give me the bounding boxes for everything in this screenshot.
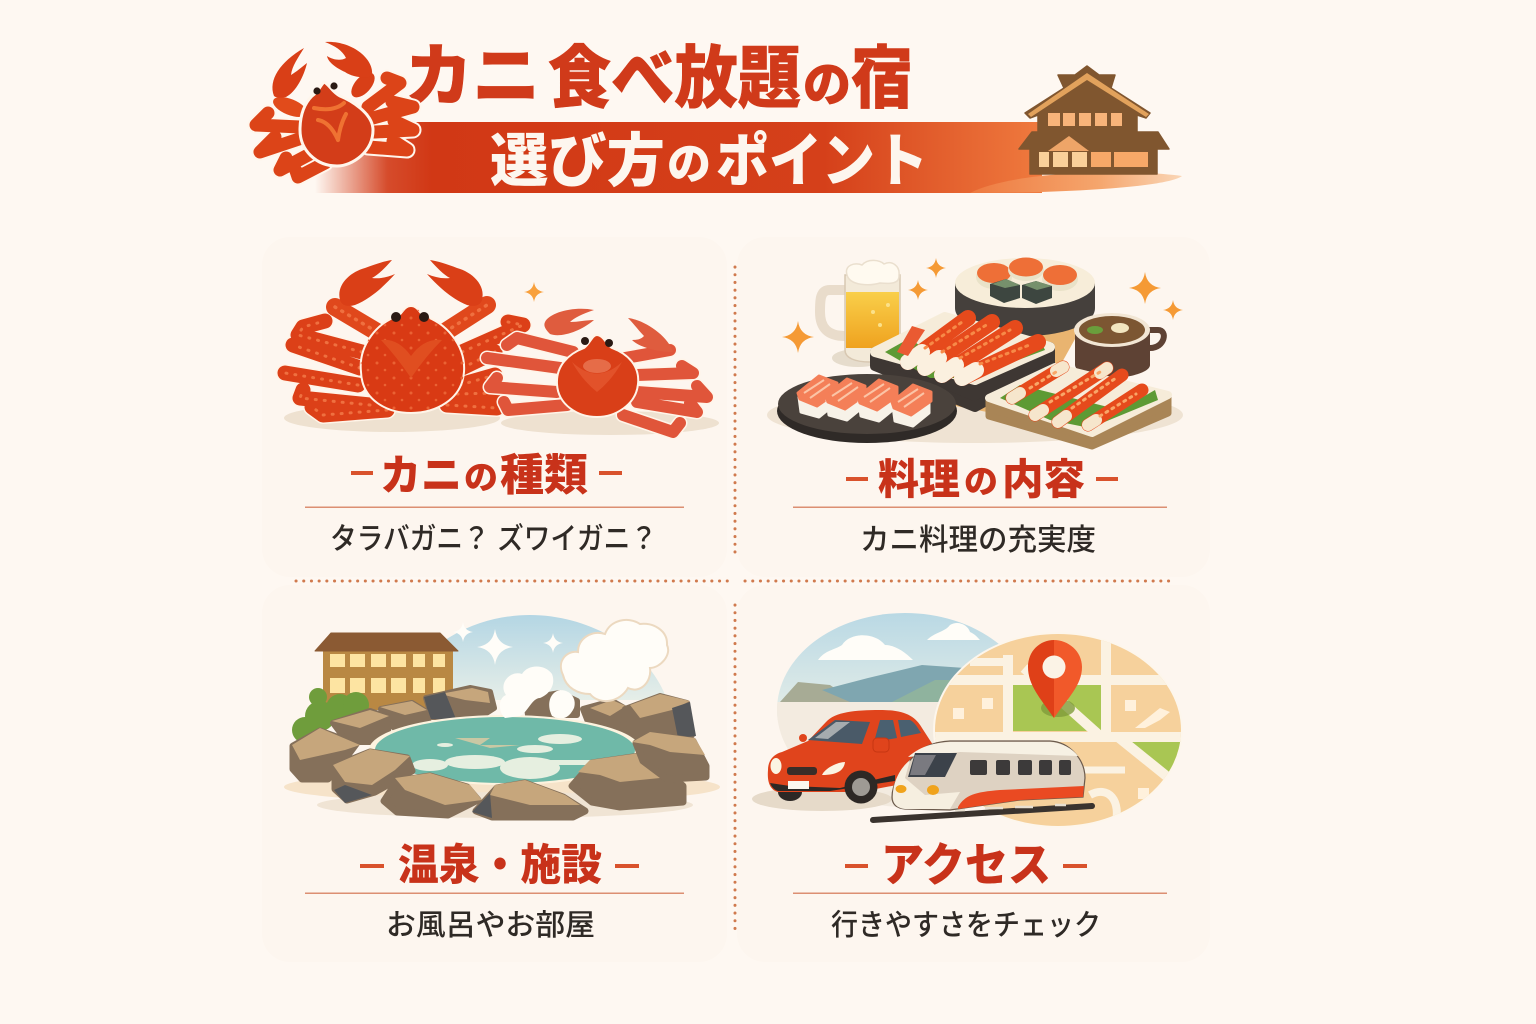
- card subtitle: タラバガニ？ ズワイガニ？: [330, 523, 657, 556]
- left sushi plate: [777, 374, 957, 443]
- card subtitle: カニ料理の充実度: [860, 524, 1096, 557]
- panel background: [262, 237, 727, 577]
- stars: [453, 622, 563, 665]
- title text: [405, 39, 913, 117]
- subtitle text: ポイント: [716, 129, 928, 194]
- subtitle text: 選び方: [490, 129, 665, 194]
- title text: 食べ放題: [548, 41, 801, 117]
- card subtitle: 行きやすさをチェック: [831, 909, 1101, 942]
- card heading: カニ: [380, 452, 462, 499]
- panel background: [737, 237, 1210, 577]
- title text: カニ: [405, 39, 540, 115]
- steam: [500, 620, 668, 718]
- icon: ryokan house: [1019, 66, 1169, 174]
- car: [768, 710, 933, 804]
- map: [930, 630, 1190, 830]
- icon: header crab: [256, 42, 413, 177]
- scenery: [777, 613, 998, 806]
- divider: [793, 892, 1167, 894]
- header banner: [256, 39, 1182, 194]
- illustration: crab feast: [767, 258, 1183, 446]
- subtitle text: [490, 129, 928, 194]
- map pin: [1028, 640, 1082, 718]
- dotted separators: [296, 267, 1175, 933]
- icon: sparkle: [524, 282, 544, 302]
- panel background: [262, 585, 727, 962]
- title text: 宿: [851, 41, 913, 117]
- card heading: の: [964, 463, 998, 500]
- illustration: access: [752, 600, 1190, 830]
- beer mug: [820, 260, 900, 362]
- top plate: [955, 258, 1095, 336]
- ribbon: [315, 122, 1182, 193]
- subtitle text: の: [667, 140, 711, 189]
- pool: [369, 715, 641, 785]
- car shadow: [752, 787, 892, 811]
- card heading: の: [464, 459, 498, 496]
- card heading: [351, 451, 622, 500]
- back rocks: [332, 688, 696, 742]
- card heading: アクセス: [881, 839, 1051, 891]
- illustration: two crabs: [284, 260, 719, 435]
- card heading: 内容: [1002, 456, 1085, 503]
- center crab platter: [875, 317, 1050, 407]
- panel: onsen and facilities: [262, 585, 727, 962]
- divider: [793, 506, 1167, 508]
- right crab board: [989, 367, 1168, 446]
- divider: [305, 892, 684, 894]
- bush: [292, 688, 369, 743]
- card heading: 種類: [500, 451, 588, 500]
- hotel: [315, 633, 458, 710]
- train: [892, 741, 1085, 810]
- title text: の: [803, 59, 851, 112]
- soup cup: [1074, 313, 1164, 378]
- card heading: 料理: [878, 456, 960, 503]
- divider: [305, 506, 684, 508]
- panel background: [737, 585, 1210, 962]
- card heading: [846, 456, 1118, 503]
- card subtitle: お風呂やお部屋: [386, 909, 595, 942]
- front rocks: [292, 728, 706, 818]
- panel: access: [752, 613, 1181, 938]
- card heading: 温泉・施設: [398, 842, 602, 890]
- sparkles: [782, 258, 1183, 353]
- illustration: onsen: [284, 615, 720, 818]
- panel: crab types: [262, 237, 727, 577]
- panel: dishes: [737, 237, 1210, 577]
- train track: [873, 805, 1092, 820]
